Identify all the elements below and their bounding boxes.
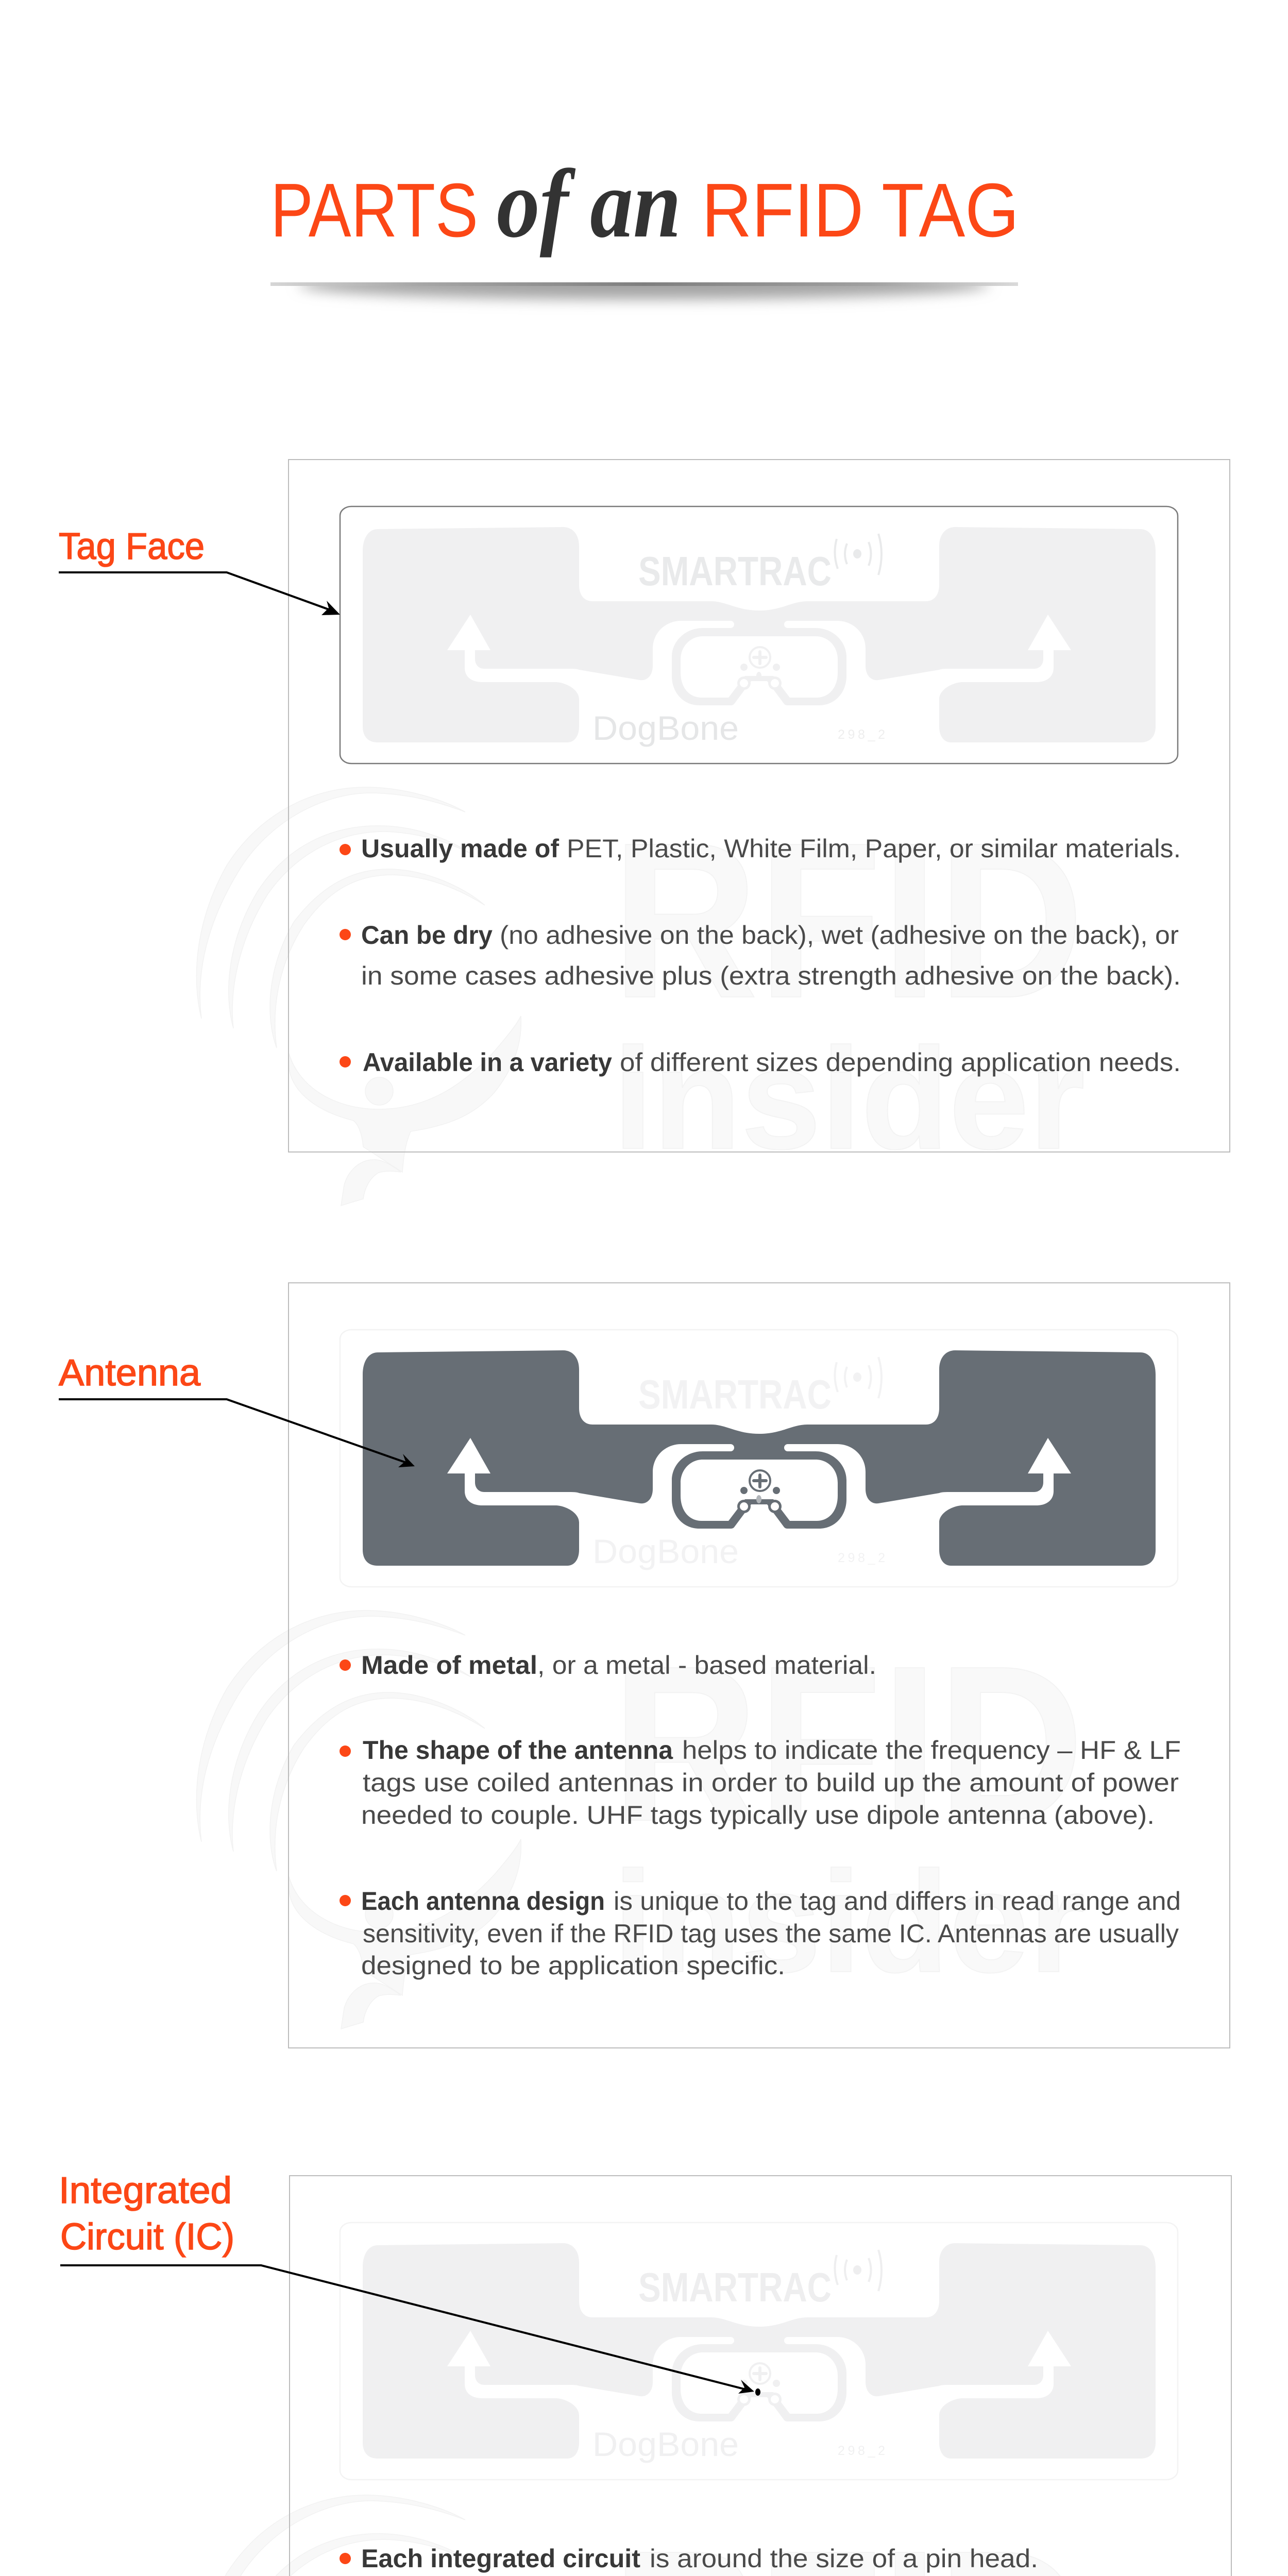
panel border [289, 460, 1230, 1152]
bullets: integrated circuit [340, 2544, 1181, 2576]
arrow: Tag Face leader [59, 572, 340, 615]
bullets: tag face: Can be dry [361, 921, 493, 950]
watermark: RFID insider: insider [613, 1019, 1085, 1179]
heading: Integrated Circuit (IC): Integrated [59, 2170, 232, 2211]
tag diagram: pale dogbone: 298_2 [838, 2444, 885, 2458]
bullets: antenna: tags use coiled antennas in order to build up the amount of power [363, 1768, 1179, 1797]
watermark: RFID insider: RFID [612, 797, 1084, 1044]
bullets: tag face: Available in a variety [363, 1048, 612, 1077]
bullets: antenna: Each antenna design [361, 1887, 605, 1916]
bullets: integrated circuit: Each integrated circuit [361, 2544, 640, 2573]
watermark: RFID insider [196, 787, 1085, 1206]
heading: Integrated Circuit (IC): Circuit (IC) [60, 2216, 234, 2258]
panel: tag face [196, 460, 1230, 1206]
tag face outline [340, 506, 1178, 764]
bullets: tag face: Usually made of [361, 834, 559, 863]
tag diagram: pale dogbone: DogBone [592, 2425, 739, 2463]
panel: antenna [196, 1283, 1230, 2048]
bullets: tag face [340, 834, 1181, 1077]
bullets: tag face: of different sizes depending application needs. [620, 1048, 1181, 1077]
heading: Integrated Circuit (IC) [59, 2170, 234, 2258]
bullets: antenna: needed to couple. UHF tags typically use dipole antenna (above). [361, 1801, 1155, 1829]
antenna: pale dogbone [363, 527, 1156, 742]
panel border [290, 2176, 1231, 2576]
bullets: integrated circuit: is around the size of a pin head. [650, 2544, 1038, 2573]
tag diagram: antenna highlighted: SMARTRAC [638, 1371, 832, 1417]
tag diagram: antenna highlighted: DogBone [592, 1532, 739, 1570]
tag print: SMARTRAC DogBone: 298_2 [838, 727, 885, 742]
tag diagram: pale dogbone: SMARTRAC [638, 2264, 832, 2310]
title [270, 150, 1019, 258]
bullets: antenna: designed to be application specific. [361, 1951, 785, 1980]
panel border [289, 1283, 1230, 2048]
watermark: RFID insider [196, 2495, 1085, 2576]
heading: Antenna: Antenna [59, 1352, 201, 1394]
bullets: antenna: Made of metal [361, 1651, 537, 1680]
title: of an [497, 150, 681, 258]
watermark: RFID insider [196, 1611, 1085, 2029]
tag diagram: antenna highlighted [340, 1330, 1178, 1587]
bullets: antenna: sensitivity, even if the RFID tag uses the same IC. Antennas are usually [363, 1919, 1179, 1948]
panel: integrated circuit [196, 2176, 1231, 2576]
watermark: RFID insider: RFID [612, 1620, 1084, 1868]
arrow: IC leader [60, 2265, 754, 2394]
bullets: antenna: , or a metal - based material. [537, 1651, 876, 1680]
bullets: antenna: The shape of the antenna [363, 1736, 673, 1765]
bullets: antenna [340, 1651, 1181, 1980]
tag print: SMARTRAC DogBone: DogBone [592, 709, 739, 747]
title: RFID TAG [702, 168, 1019, 253]
icon: IC dot [755, 2388, 760, 2396]
tag diagram: antenna highlighted: 298_2 [838, 1551, 885, 1565]
title: PARTS [270, 168, 478, 253]
bullets: antenna: helps to indicate the frequency – HF & LF [682, 1736, 1181, 1765]
tag print: SMARTRAC DogBone [592, 534, 885, 747]
bullets: tag face: (no adhesive on the back), wet (adhesive on the back), or [500, 921, 1179, 950]
bullets: antenna: is unique to the tag and differs in read range and [614, 1887, 1181, 1916]
title rule with shadow [270, 282, 1018, 308]
arrow: Antenna leader [59, 1399, 415, 1467]
heading: Tag Face: Tag Face [59, 526, 205, 567]
bullets: tag face: PET, Plastic, White Film, Paper, or similar materials. [567, 834, 1181, 863]
tag print: SMARTRAC DogBone: SMARTRAC [638, 548, 832, 594]
bullets: tag face: in some cases adhesive plus (extra strength adhesive on the back). [361, 961, 1181, 990]
watermark: RFID insider: insider [613, 1842, 1085, 2003]
tag diagram: pale dogbone [340, 2223, 1178, 2480]
